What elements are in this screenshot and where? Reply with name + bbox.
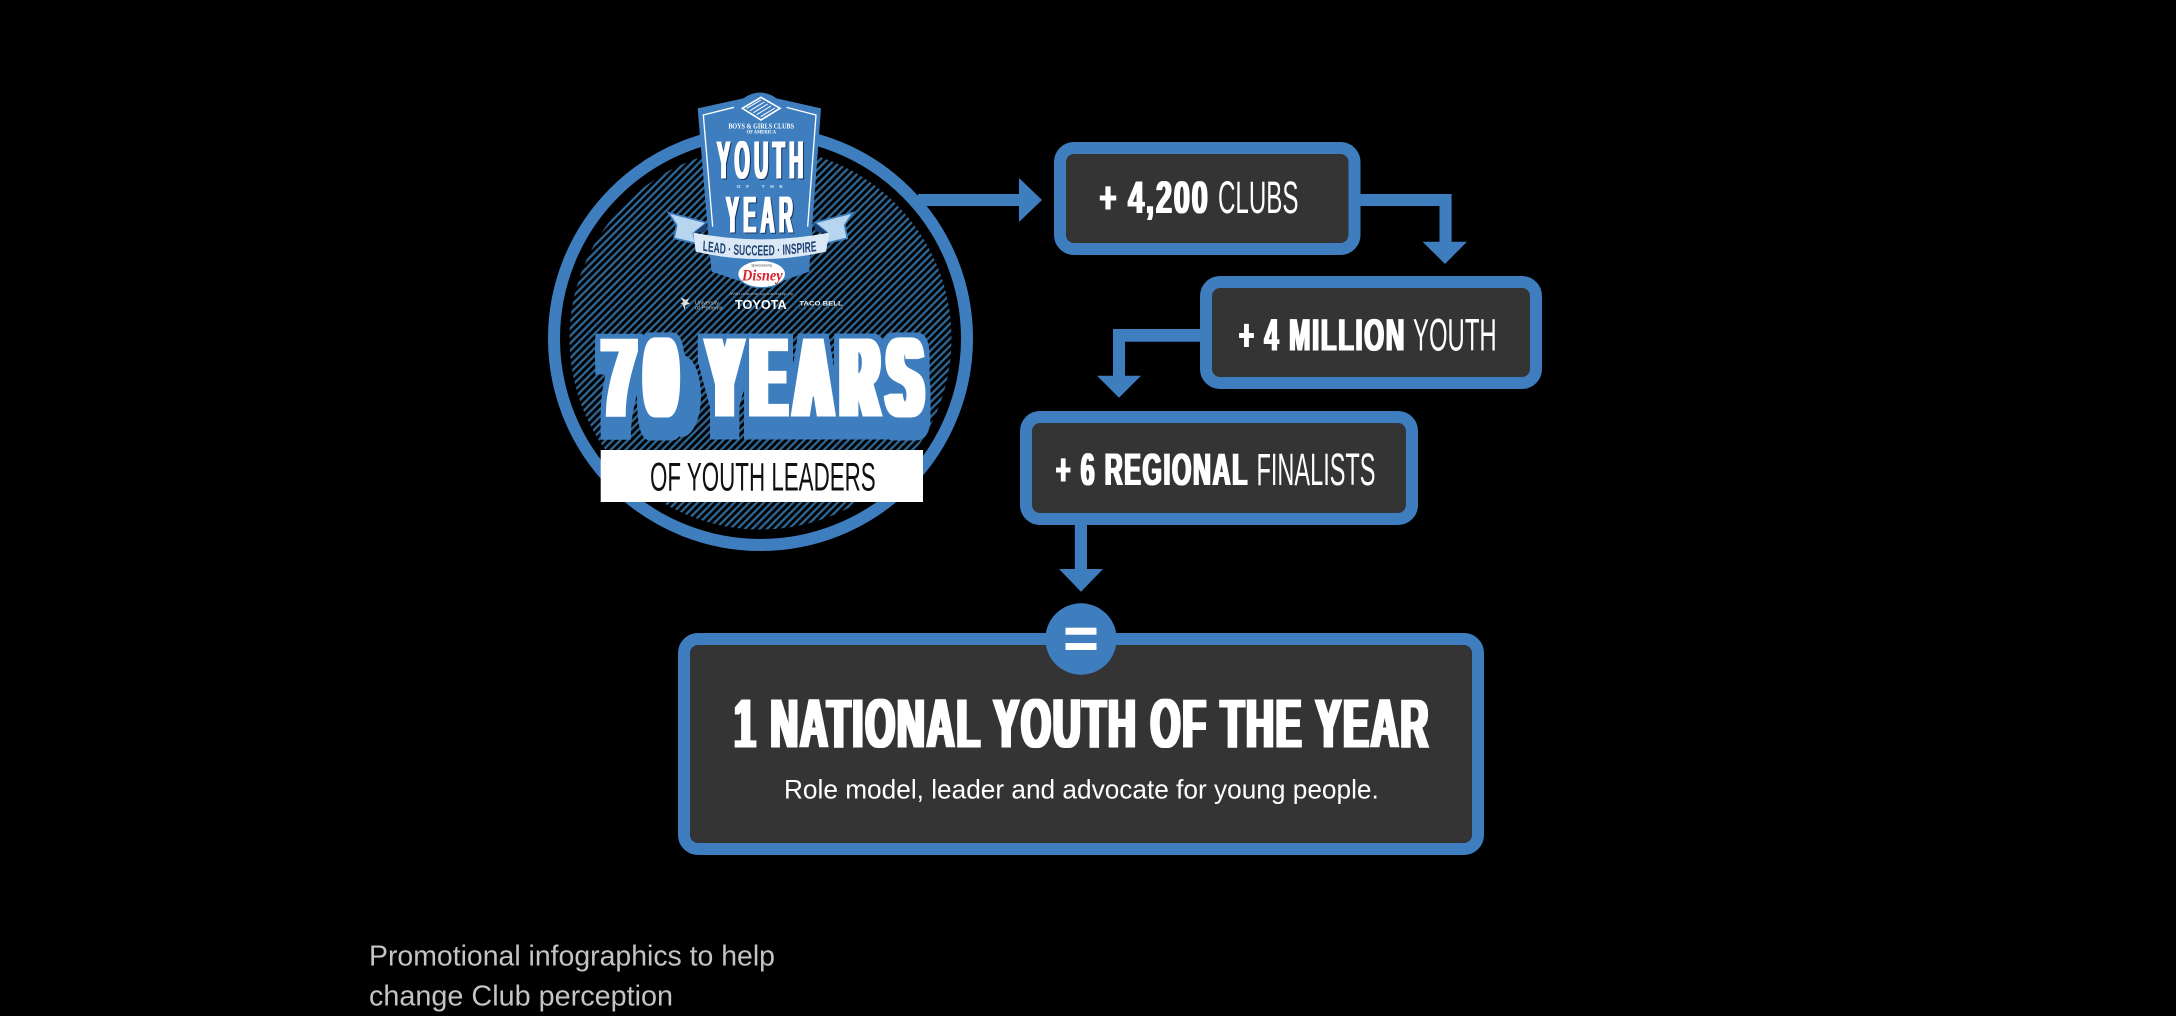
box: 6 regional finalists [1026, 417, 1412, 519]
national sponsors: University [695, 301, 719, 307]
shield [698, 92, 821, 281]
box: 1 national youth of the year [684, 603, 1478, 849]
shield inner outline [703, 107, 816, 227]
youth of the year shield logo [666, 92, 855, 312]
badge: 70 years of youth leaders: YEARS [708, 315, 932, 441]
box: 6 regional finalists: + 6 REGIONAL [1056, 444, 1249, 495]
badge: 70 years of youth leaders [548, 92, 973, 551]
arrow: clubs to youth [1360, 194, 1467, 264]
of youth leaders banner: OF YOUTH LEADERS [650, 456, 876, 500]
arrow: finalists to national [1059, 525, 1103, 592]
disney sponsor oval [738, 260, 786, 288]
70 years heading: 70 [604, 315, 688, 441]
national sponsors: FOUNDATION [799, 306, 843, 310]
caption [369, 940, 775, 1012]
box: 4 million youth: + 4 MILLION [1239, 310, 1406, 361]
hatched circle [554, 132, 967, 545]
youth of the year shield logo: YEAR [726, 185, 797, 243]
national sponsors: TOYOTA [735, 297, 787, 312]
clubs logo mark [742, 97, 780, 120]
clubs name [728, 121, 794, 136]
equals badge [1045, 603, 1117, 675]
ribbon motto: LEAD · SUCCEED · INSPIRE [703, 240, 816, 256]
youth of the year wordmark [717, 131, 808, 243]
national sponsors: With national sponsorship by [730, 291, 793, 296]
clubs name: BOYS & GIRLS CLUBS [728, 121, 794, 130]
of youth leaders banner [601, 450, 923, 502]
arrow: circle to clubs [918, 178, 1042, 222]
arrow: youth to finalists [1097, 329, 1200, 398]
national sponsors [681, 291, 843, 312]
national sponsors: TACO BELL [799, 302, 843, 308]
caption: Promotional infographics to help [369, 940, 775, 972]
box: 6 regional finalists: FINALISTS [1256, 444, 1376, 495]
national sponsors: of Phoenix [695, 305, 723, 311]
national description: Role model, leader and advocate for young people. [784, 774, 1379, 804]
ribbon [666, 211, 855, 260]
box: 4,200 clubs [1060, 148, 1354, 249]
disney sponsor oval: Sponsored by [751, 263, 772, 267]
caption: change Club perception [369, 980, 673, 1012]
youth of the year shield logo: YOUTH [717, 131, 808, 190]
disney sponsor oval: Disney [741, 268, 783, 285]
box: 4 million youth: YOUTH [1413, 310, 1497, 361]
youth of the year wordmark: OF THE [737, 184, 783, 190]
national heading: 1 NATIONAL YOUTH OF THE YEAR [734, 685, 1430, 763]
box: 4,200 clubs: + 4,200 [1100, 172, 1210, 223]
clubs name: OF AMERICA [747, 131, 776, 136]
box: 4,200 clubs: CLUBS [1218, 172, 1298, 223]
box: 4 million youth [1206, 282, 1536, 383]
70 years heading [604, 315, 932, 441]
